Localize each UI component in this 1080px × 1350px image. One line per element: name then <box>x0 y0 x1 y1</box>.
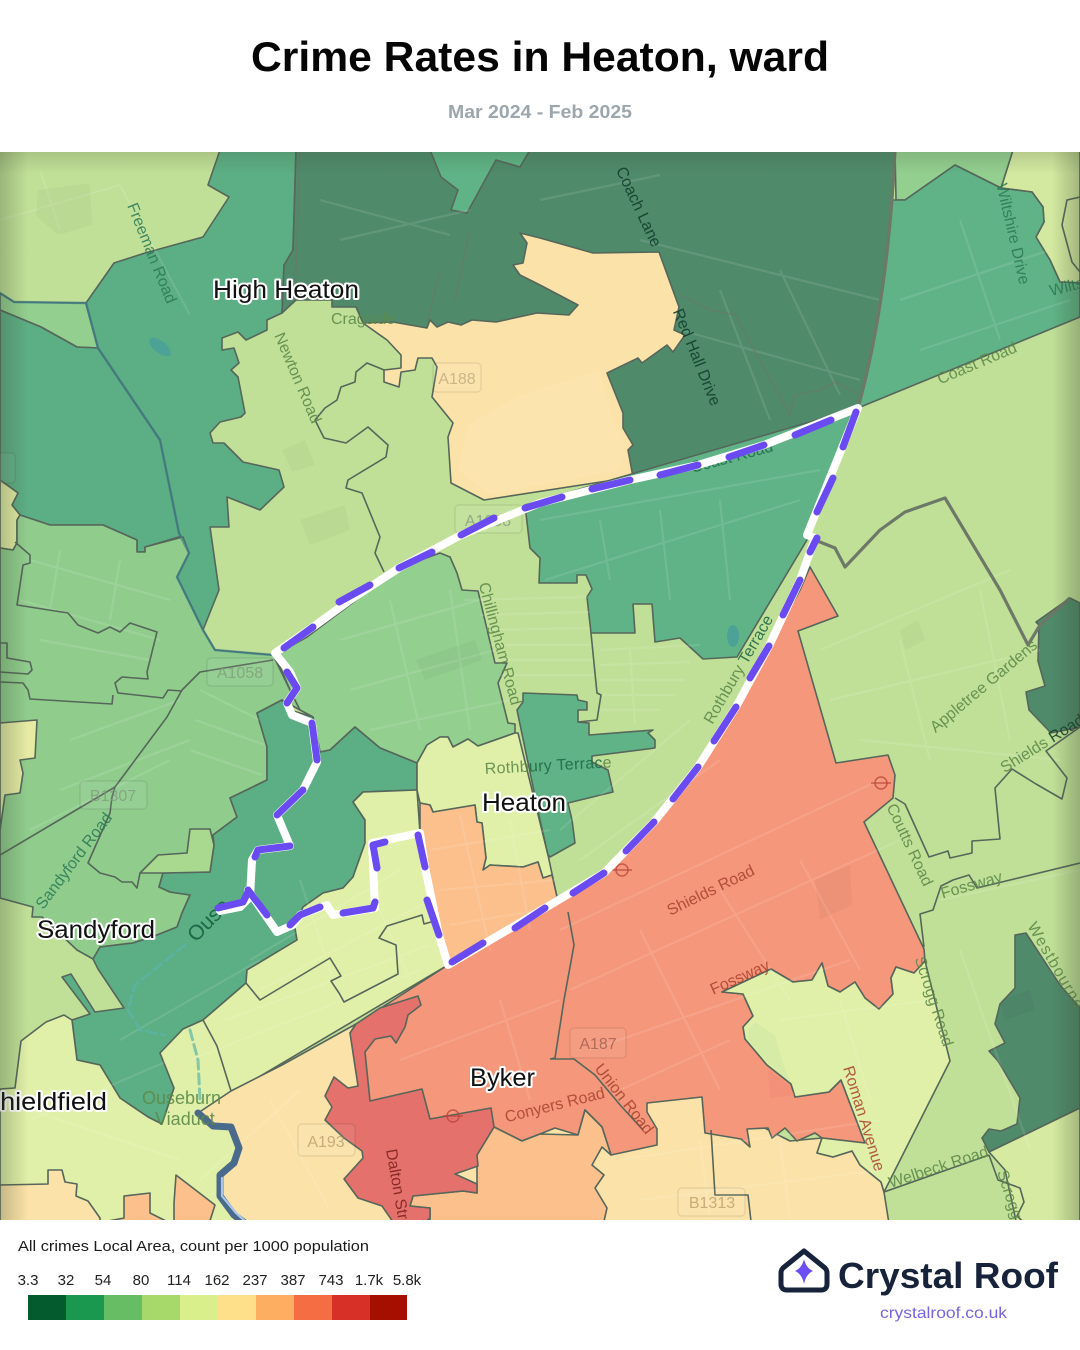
ward boundary: white outline <box>220 408 858 965</box>
road labels: Ouse <box>183 894 234 946</box>
darker land-use patches <box>36 183 1035 1020</box>
river Ouseburn and Tyne <box>0 293 273 1232</box>
road labels: Fossway <box>939 869 1004 903</box>
icon: metro station symbols <box>443 777 891 1122</box>
road labels: Dalton Street <box>382 1148 415 1243</box>
heavy grey ward boundary line, east <box>815 150 1070 645</box>
road labels: Viaduct <box>155 1109 215 1129</box>
place label: Heaton: Heaton <box>482 789 566 817</box>
road labels: Coach Lane <box>612 164 664 250</box>
internal borders <box>0 197 1080 1230</box>
place label: Sandyford: Sandyford <box>37 916 155 944</box>
legend values: 54 <box>95 1272 111 1289</box>
legend values: 162 <box>204 1272 230 1289</box>
map edge vignette <box>0 152 1080 1220</box>
icon: ponds <box>146 334 739 647</box>
legend values: 743 <box>318 1272 344 1289</box>
legend values: 32 <box>58 1272 74 1289</box>
legend values: 237 <box>242 1272 268 1289</box>
road labels: Coast Road <box>689 439 775 477</box>
legend values: 80 <box>133 1272 149 1289</box>
road number badges <box>0 363 745 1216</box>
map regions <box>0 150 1080 1230</box>
road labels: Scrogg Road <box>911 955 956 1049</box>
road labels: Conyers Road <box>503 1085 607 1126</box>
road labels: Chillingham Road <box>475 581 524 707</box>
title: Crime Rates in Heaton, ward <box>251 33 829 80</box>
website url: crystalroof.co.uk <box>880 1305 1008 1322</box>
road labels: Rothbury Terrace <box>484 754 612 778</box>
park and patches <box>748 1022 794 1096</box>
road labels: Wiltshire Drive <box>993 182 1032 286</box>
faint boundary lines in dark zone <box>295 150 860 415</box>
road labels: Shields Road <box>665 862 758 919</box>
legend values: 114 <box>167 1272 191 1289</box>
road labels: Sandyford Road <box>33 810 116 913</box>
road labels: Rothbury Terrace <box>701 612 777 727</box>
legend values: 5.8k <box>393 1272 422 1289</box>
legend values: 387 <box>280 1272 306 1289</box>
road number badges: A193 <box>307 1134 345 1151</box>
road labels: Coast Road <box>935 340 1019 388</box>
brand logo <box>781 1251 1059 1322</box>
road labels: Union Road <box>591 1061 656 1138</box>
road labels: Welbeck Road <box>887 1144 991 1192</box>
place label: Byker: Byker <box>470 1064 535 1092</box>
street network <box>0 170 1080 1220</box>
road labels: Coutts Road <box>883 801 936 889</box>
road labels: Battle Field <box>85 1220 170 1239</box>
legend values: 1.7k <box>355 1272 384 1289</box>
road labels: Fossway <box>708 957 772 998</box>
road labels: Freeman Road <box>123 201 179 306</box>
ward boundary: purple dashes <box>218 412 856 962</box>
icon: house with star <box>781 1251 827 1290</box>
road labels: Roman Avenue <box>839 1064 887 1173</box>
road labels: Red Hall Drive <box>669 306 723 408</box>
road number badges: A187 <box>579 1036 617 1053</box>
road labels: Newton Road <box>270 330 324 426</box>
road labels: Cragside <box>331 311 395 328</box>
road labels: Appletree Gardens <box>927 637 1041 736</box>
road labels: Scrogg Road <box>993 1168 1038 1262</box>
legend values: 3.3 <box>18 1272 38 1289</box>
legend values <box>18 1272 422 1289</box>
map base: light green areas <box>0 152 1080 1220</box>
legend <box>18 1238 422 1320</box>
subtitle: date range: Mar 2024 - Feb 2025 <box>448 102 632 122</box>
road number badges: B1313 <box>689 1195 735 1212</box>
wordmark: Crystal Roof <box>838 1255 1059 1296</box>
road number badges: A188 <box>438 371 476 388</box>
legend title: All crimes Local Area, count per 1000 population <box>18 1238 369 1255</box>
road number badges: B1307 <box>90 788 136 805</box>
road number badges: A1058 <box>465 513 511 530</box>
road number badges: A1058 <box>217 665 263 682</box>
place label: High Heaton: High Heaton <box>213 276 359 304</box>
road labels: Ouseburn <box>142 1088 221 1108</box>
road labels <box>33 164 1080 1262</box>
legend colour scale <box>28 1295 407 1320</box>
